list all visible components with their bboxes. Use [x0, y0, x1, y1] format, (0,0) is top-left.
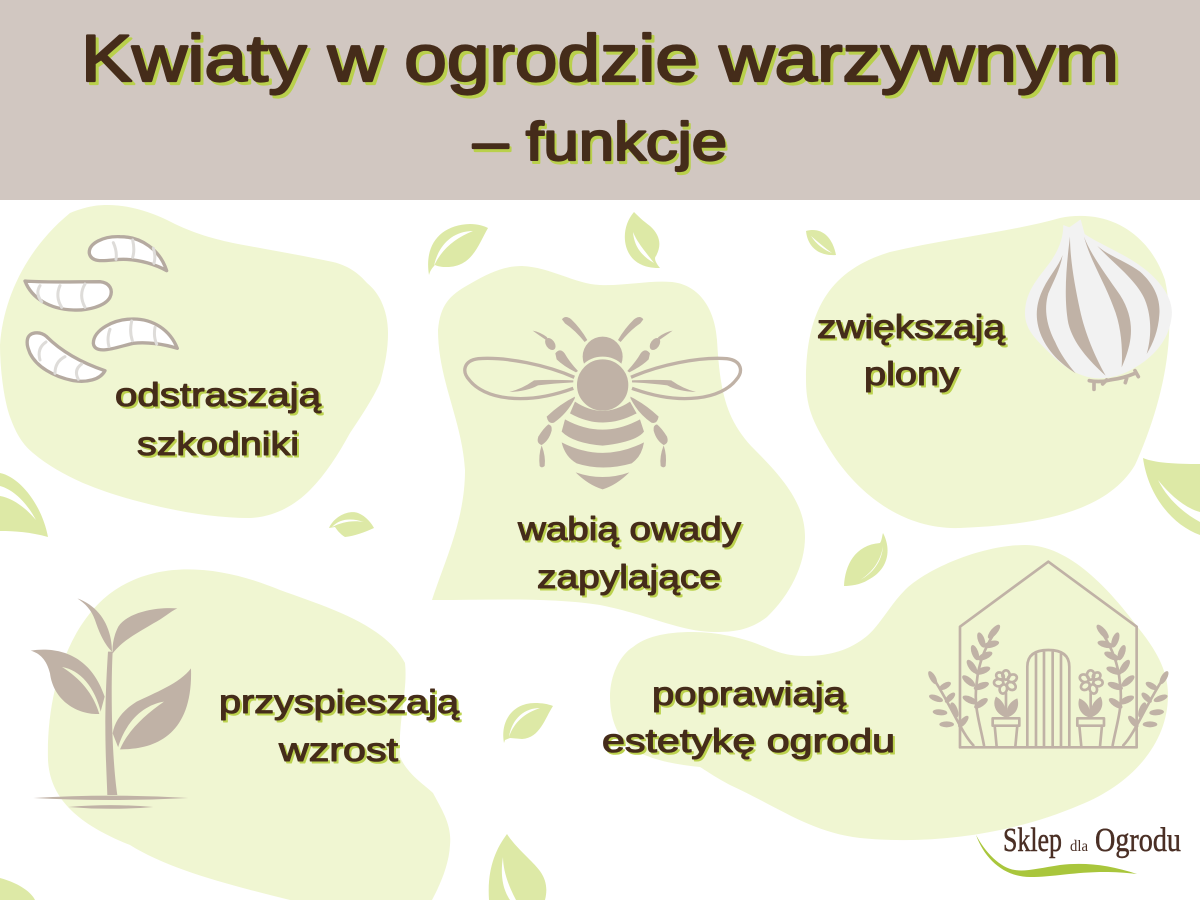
flower [994, 670, 1018, 717]
label: zwiększają plony: zwiększają [819, 310, 1008, 347]
label: poprawiają estetykę ogrodu: estetykę ogrodu [604, 724, 897, 761]
header band [0, 0, 1200, 200]
label: odstraszają szkodniki: szkodniki [139, 427, 301, 464]
blob: centre panel [432, 266, 805, 632]
title: – funkcje [475, 115, 729, 175]
title: Kwiaty w ogrodzie warzywnym [81, 21, 1119, 95]
logo: Sklep dla Ogrodu [976, 822, 1181, 877]
label: wabią owady zapylające: wabią owady [517, 510, 742, 547]
title: Kwiaty w ogrodzie warzywnym [84, 24, 1122, 98]
bee abdomen [562, 402, 644, 489]
tall vine [976, 628, 997, 745]
label: przyspieszają wzrost: przyspieszają [221, 685, 462, 722]
pot [993, 718, 1019, 747]
top left leaf [77, 598, 112, 652]
larva 1 [89, 237, 167, 271]
label: wabią owady zapylające: zapylające [539, 560, 723, 597]
logo swoosh [976, 835, 1137, 877]
larva 4 [27, 333, 105, 381]
label: wabią owady zapylające: wabią owady [519, 512, 744, 549]
title: – funkcje [473, 112, 727, 172]
leaf: small centre left [329, 512, 374, 537]
icon: greenhouse [926, 562, 1170, 747]
onion bulb [1025, 219, 1172, 378]
label: przyspieszają wzrost: wzrost [278, 731, 398, 768]
logo wordmark: Ogrodu [1095, 822, 1181, 859]
label: zwiększają plony: plony [866, 357, 962, 394]
blob: bottom left panel [48, 569, 450, 900]
label: przyspieszają wzrost: przyspieszają [219, 683, 460, 720]
label: odstraszają szkodniki [115, 376, 324, 464]
leaf: centre bottom [503, 703, 553, 743]
blob: top right panel [806, 216, 1169, 528]
bee head [583, 337, 623, 377]
label: zwiększają plony: plony [864, 355, 960, 392]
label: odstraszają szkodniki: odstraszają [117, 378, 324, 415]
house outline [960, 562, 1137, 747]
label: zwiększają plony [817, 308, 1008, 394]
bee right half limbs and wing [618, 317, 740, 467]
label: wabią owady zapylające: zapylające [537, 558, 721, 595]
short vine [933, 678, 973, 745]
title [81, 21, 1122, 175]
leaf: left edge [0, 473, 48, 537]
left plant group [926, 623, 1019, 747]
logo wordmark: dla [1070, 838, 1088, 855]
label: zwiększają plony: zwiększają [817, 308, 1006, 345]
leaf: bottom centre [489, 834, 546, 900]
right plant group [1077, 623, 1170, 747]
label: odstraszają szkodniki: odstraszają [115, 376, 322, 413]
ground lines [33, 796, 188, 809]
label: poprawiają estetykę ogrodu: poprawiają [654, 677, 849, 714]
label: przyspieszają wzrost: wzrost [280, 733, 400, 770]
larva 2 [25, 281, 111, 310]
blob: bottom right panel [610, 545, 1168, 840]
leaf: centre right [844, 533, 888, 586]
bee left half limbs and wing [465, 317, 587, 467]
logo wordmark: Sklep [1003, 822, 1062, 859]
label: poprawiają estetykę ogrodu [602, 675, 897, 761]
label: przyspieszają wzrost [219, 683, 462, 770]
label: odstraszają szkodniki: szkodniki [137, 425, 299, 462]
logo wordmark [1003, 822, 1181, 859]
blob: top left panel [0, 205, 388, 518]
leaf: bottom left corner [0, 878, 35, 900]
leaf: right edge [1143, 458, 1200, 535]
leaf: header left [428, 224, 488, 275]
icon: seedling [31, 598, 191, 809]
larva 3 [93, 319, 177, 350]
onion roots [1089, 371, 1138, 389]
label: poprawiają estetykę ogrodu: estetykę ogrodu [602, 722, 895, 759]
bee thorax [576, 358, 630, 412]
flower leaves [994, 697, 1018, 717]
top right leaf [113, 608, 177, 653]
icon: pest larvae [25, 237, 177, 381]
left leaf [31, 650, 105, 714]
stem [105, 652, 117, 795]
leaf: small top right [806, 230, 836, 255]
label: wabią owady zapylające [517, 510, 744, 597]
label: poprawiają estetykę ogrodu: poprawiają [652, 675, 847, 712]
leaf: header centre [625, 212, 660, 268]
onion stripes [1037, 237, 1160, 376]
door [1027, 650, 1069, 747]
right leaf [113, 668, 191, 749]
icon: onion [1025, 219, 1172, 389]
icon: bee [465, 317, 740, 489]
